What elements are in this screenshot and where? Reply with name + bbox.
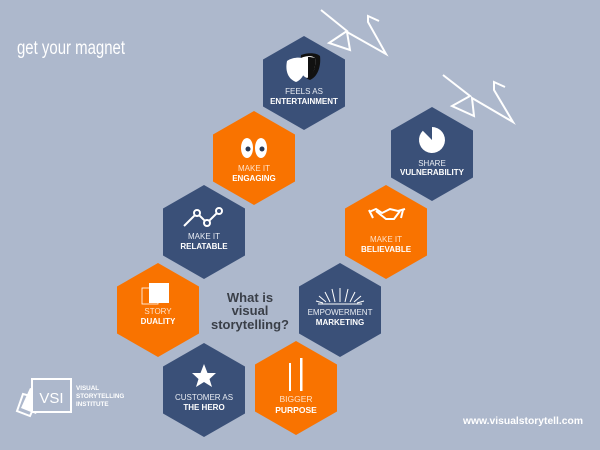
hex: bigger purpose [255, 341, 337, 435]
hex: make it engaging: ENGAGING [232, 174, 276, 183]
center text: what is visual storytelling [211, 290, 289, 332]
hex: customer as the hero: CUSTOMER AS [175, 393, 233, 402]
hex: feels as entertainment: FEELS AS [285, 87, 323, 96]
icon: handshake [369, 209, 405, 219]
logo: VSI [17, 378, 124, 416]
hex: make it engaging [213, 111, 295, 205]
hex: customer as the hero [163, 343, 245, 437]
hex: share vulnerability: SHARE [418, 159, 446, 168]
hex: make it relatable: MAKE IT [188, 232, 220, 241]
logo: VSI: VISUAL [76, 385, 99, 392]
hex: make it relatable [163, 185, 245, 279]
center text: what is visual storytelling: What is [227, 290, 273, 305]
hex: empowerment marketing: MARKETING [316, 318, 364, 327]
zigzag decoration right [443, 75, 513, 122]
icon: masks [286, 53, 320, 82]
logo: VSI: INSTITUTE [76, 401, 109, 408]
hex: customer as the hero: THE HERO [183, 403, 225, 412]
icon: sunburst [316, 288, 364, 304]
icon: line chart [184, 208, 222, 226]
hex: feels as entertainment [263, 36, 345, 130]
hex: bigger purpose: PURPOSE [275, 405, 317, 415]
hex: story duality [117, 263, 199, 357]
hex: empowerment marketing: EMPOWERMENT [308, 308, 373, 317]
hex: make it relatable: RELATABLE [180, 242, 228, 251]
hex: share vulnerability: VULNERABILITY [400, 168, 465, 177]
hex: feels as entertainment: ENTERTAINMENT [270, 97, 338, 106]
hex: make it engaging: MAKE IT [238, 164, 270, 173]
hex: make it believable [345, 185, 427, 279]
hex: empowerment marketing [299, 263, 381, 357]
icon: eyes [241, 138, 267, 158]
hex: share vulnerability [391, 107, 473, 201]
icon: pie [419, 127, 445, 153]
center text: what is visual storytelling: visual [232, 303, 268, 318]
icon: star [192, 364, 216, 387]
hex: story duality: STORY [144, 307, 172, 316]
icon: bars [289, 358, 302, 391]
logo: VSI: VSI [39, 390, 64, 407]
hex: bigger purpose: BIGGER [279, 394, 313, 404]
hex: make it believable: MAKE IT [370, 235, 402, 244]
zigzag decoration top [321, 10, 386, 54]
hex: make it believable: BELIEVABLE [361, 245, 412, 254]
hex: story duality: DUALITY [141, 317, 176, 326]
icon: squares [142, 283, 169, 304]
url footer: www.visualstorytell.com [462, 416, 583, 427]
center text: what is visual storytelling: storytelling? [211, 317, 289, 332]
heading: get your magnet: get your magnet [17, 38, 126, 59]
logo: VSI: STORYTELLING [76, 393, 124, 400]
